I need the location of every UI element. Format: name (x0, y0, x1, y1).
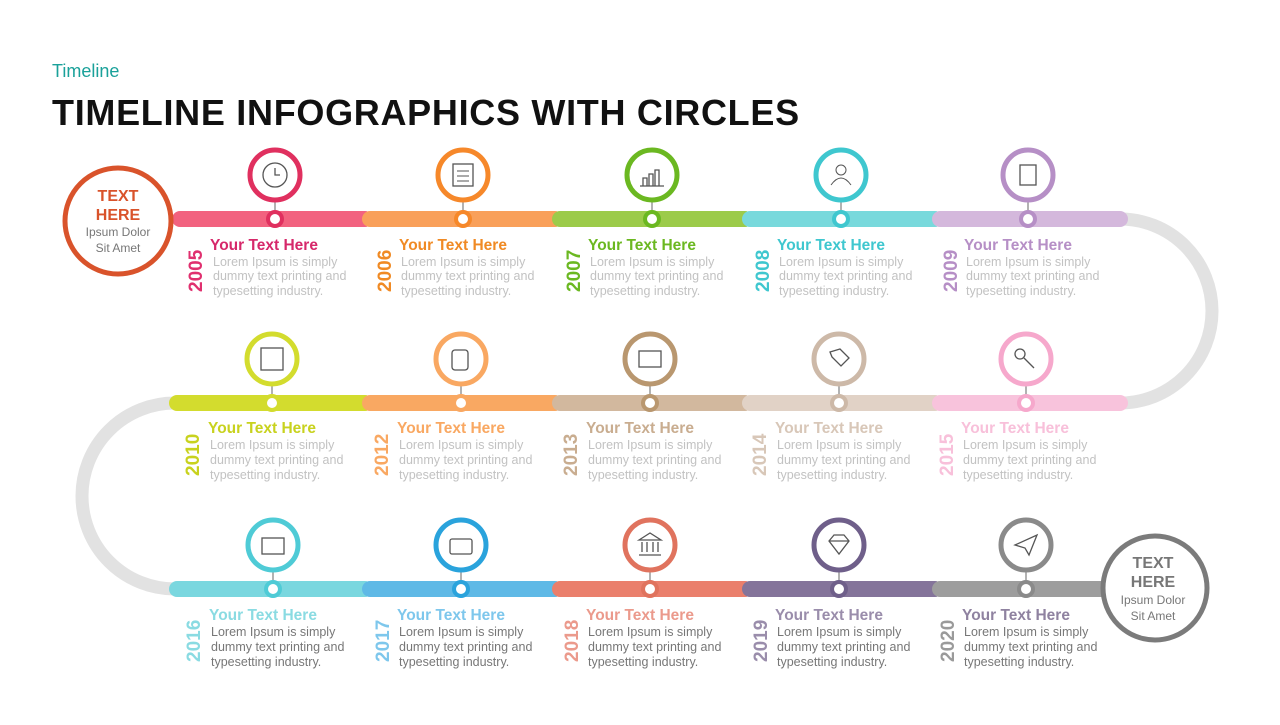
2014: 2014 (750, 433, 771, 476)
2018: dummy text printing and (588, 640, 721, 654)
2019: Your Text Here (775, 607, 883, 624)
2013: 2013 (561, 434, 582, 476)
2014: Your Text Here (775, 420, 883, 437)
2019: 2019 (751, 620, 772, 662)
2005: Lorem Ipsum is simply (213, 255, 338, 269)
2018: Your Text Here (586, 607, 694, 624)
2013: Lorem Ipsum is simply (588, 438, 713, 452)
end circle: HERE (1131, 574, 1176, 591)
2006 (375, 150, 534, 298)
2010: typesetting industry. (210, 468, 320, 482)
2015 (937, 334, 1096, 482)
end circle: Ipsum Dolor (1121, 593, 1185, 607)
2018: typesetting industry. (588, 655, 698, 669)
2006: 2006 (375, 250, 396, 292)
2016 (184, 520, 344, 669)
2016: Lorem Ipsum is simply (211, 625, 336, 639)
2019 (751, 520, 910, 669)
2012: 2012 (372, 434, 393, 476)
2015: dummy text printing and (963, 453, 1096, 467)
2008: Your Text Here (777, 237, 885, 254)
start circle: TEXT (98, 188, 139, 205)
2020: Your Text Here (962, 607, 1070, 624)
2012 (372, 334, 532, 482)
2015: typesetting industry. (963, 468, 1073, 482)
2007: Lorem Ipsum is simply (590, 255, 715, 269)
2016: 2016 (184, 620, 205, 662)
2018 (562, 520, 721, 669)
2017: Lorem Ipsum is simply (399, 625, 524, 639)
2006: typesetting industry. (401, 284, 511, 298)
milestones row 2 (183, 334, 1096, 482)
2020: typesetting industry. (964, 655, 1074, 669)
2018: 2018 (562, 620, 583, 662)
2009: dummy text printing and (966, 269, 1099, 283)
2007: typesetting industry. (590, 284, 700, 298)
2007: Your Text Here (588, 237, 696, 254)
2005: Your Text Here (210, 237, 318, 254)
2006: dummy text printing and (401, 269, 534, 283)
2020: 2020 (938, 620, 959, 662)
2009 (941, 150, 1099, 298)
2016: dummy text printing and (211, 640, 344, 654)
start circle: Ipsum Dolor (86, 225, 150, 239)
start circle (65, 168, 171, 274)
row 1 line (180, 211, 1120, 227)
2014: dummy text printing and (777, 453, 910, 467)
2013: dummy text printing and (588, 453, 721, 467)
end circle (1103, 536, 1207, 640)
2013 (561, 334, 721, 482)
2007 (564, 150, 723, 298)
2017: 2017 (373, 620, 394, 662)
2010: 2010 (183, 434, 204, 476)
2008 (753, 150, 912, 298)
2007: 2007 (564, 250, 585, 292)
2020: dummy text printing and (964, 640, 1097, 654)
2016: Your Text Here (209, 607, 317, 624)
2010: dummy text printing and (210, 453, 343, 467)
2012: typesetting industry. (399, 468, 509, 482)
2017: dummy text printing and (399, 640, 532, 654)
2015: Your Text Here (961, 420, 1069, 437)
2015: 2015 (937, 433, 958, 476)
2015: Lorem Ipsum is simply (963, 438, 1088, 452)
2014: Lorem Ipsum is simply (777, 438, 902, 452)
subtitle: Timeline (52, 61, 119, 81)
start circle: Sit Amet (96, 241, 141, 255)
2006: Lorem Ipsum is simply (401, 255, 526, 269)
2017: typesetting industry. (399, 655, 509, 669)
2014 (750, 334, 910, 482)
2009: Lorem Ipsum is simply (966, 255, 1091, 269)
2005: dummy text printing and (213, 269, 346, 283)
2012: Lorem Ipsum is simply (399, 438, 524, 452)
2009: typesetting industry. (966, 284, 1076, 298)
connector arcs (82, 219, 1212, 589)
row 3 line (177, 581, 1105, 597)
2016: typesetting industry. (211, 655, 321, 669)
2007: dummy text printing and (590, 269, 723, 283)
title: TIMELINE INFOGRAPHICS WITH CIRCLES (52, 92, 800, 133)
2012: dummy text printing and (399, 453, 532, 467)
2005 (186, 150, 346, 298)
2008: typesetting industry. (779, 284, 889, 298)
2008: dummy text printing and (779, 269, 912, 283)
2020 (938, 520, 1097, 669)
2010: Lorem Ipsum is simply (210, 438, 335, 452)
2020: Lorem Ipsum is simply (964, 625, 1089, 639)
2019: typesetting industry. (777, 655, 887, 669)
2013: typesetting industry. (588, 468, 698, 482)
2005: typesetting industry. (213, 284, 323, 298)
2010 (183, 334, 343, 482)
2018: Lorem Ipsum is simply (588, 625, 713, 639)
2017: Your Text Here (397, 607, 505, 624)
2010: Your Text Here (208, 420, 316, 437)
2005: 2005 (186, 249, 207, 292)
2006: Your Text Here (399, 237, 507, 254)
end circle: TEXT (1133, 555, 1174, 572)
2008: 2008 (753, 250, 774, 292)
start circle: HERE (96, 207, 141, 224)
milestones row 3 (184, 520, 1097, 669)
2019: dummy text printing and (777, 640, 910, 654)
2013: Your Text Here (586, 420, 694, 437)
2014: typesetting industry. (777, 468, 887, 482)
2019: Lorem Ipsum is simply (777, 625, 902, 639)
2009: 2009 (941, 250, 962, 292)
2008: Lorem Ipsum is simply (779, 255, 904, 269)
2017 (373, 520, 532, 669)
row 2 line (177, 395, 1120, 411)
milestones row 1 (186, 150, 1099, 298)
2009: Your Text Here (964, 237, 1072, 254)
end circle: Sit Amet (1131, 609, 1176, 623)
2012: Your Text Here (397, 420, 505, 437)
